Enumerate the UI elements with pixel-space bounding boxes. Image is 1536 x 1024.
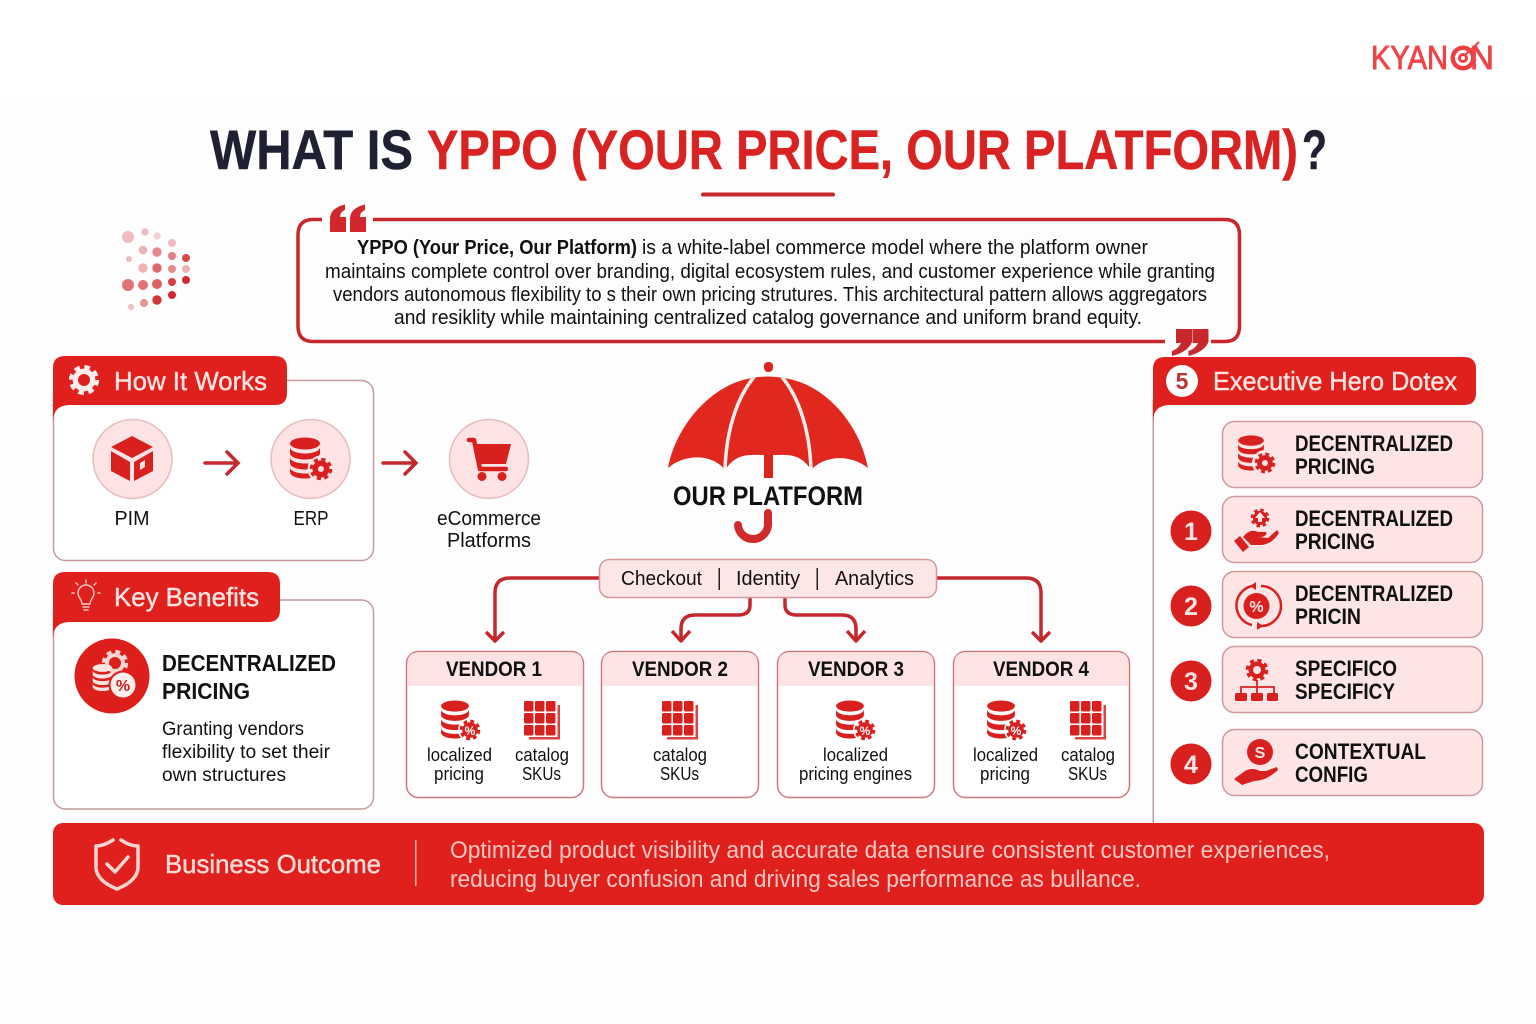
text: definition paragraph: maintains complete control over branding, digital ecosystem rules, and customer experience while granting: [325, 261, 1215, 283]
icon: catalog SKUs: [1070, 701, 1106, 740]
label: business outcome: Business Outcome: [165, 849, 381, 879]
shared services bar: Checkout: [621, 568, 702, 590]
text: benefit description: flexibility to set their: [162, 742, 331, 763]
card: decentralized pricing: [1222, 422, 1482, 488]
icon: shopping cart: [450, 420, 528, 498]
card 3: specifico specificy: SPECIFICY: [1295, 679, 1395, 704]
icon: localized pricing engines: %: [860, 724, 871, 738]
icon: catalog SKUs: [662, 701, 698, 740]
icon: opening quote mark: [330, 204, 366, 232]
labels: vendor 4: SKUs: [1068, 764, 1107, 784]
card 3: specifico specificy: [1170, 646, 1482, 712]
panel: vendor 1: [406, 652, 584, 798]
heading tab: how it works: How It Works: [114, 366, 267, 396]
decorative dot cluster: [122, 228, 190, 310]
logo: Kyanon: KYAN: [1371, 39, 1448, 76]
heading tab: how it works: [53, 356, 287, 422]
panel: vendor 3: [778, 652, 934, 798]
heading tab: key benefits: [53, 572, 280, 639]
label: eCommerce Platforms: eCommerce: [437, 508, 541, 530]
heading: our platform: OUR PLATFORM: [673, 481, 863, 511]
labels: vendor 2: [653, 745, 707, 784]
card 4: contextual config: CONTEXTUAL: [1295, 739, 1426, 764]
card 1: decentralized pricing: PRICING: [1295, 529, 1375, 554]
icon: localized pricing: %: [465, 724, 476, 738]
card 2: decentralized pricin: [1170, 572, 1482, 638]
panel: vendor 2: VENDOR 2: [632, 658, 728, 681]
icon: decentralized pricing badge: [74, 638, 150, 714]
panel: vendor 4: VENDOR 4: [993, 658, 1089, 681]
icon: localized pricing: [441, 700, 482, 742]
heading: decentralized pricing: DECENTRALIZED: [162, 650, 336, 676]
labels: vendor 3: localized: [823, 745, 888, 765]
card: decentralized pricing: DECENTRALIZED: [1295, 431, 1453, 456]
card 4: contextual config: [1170, 730, 1482, 796]
card 4: contextual config: CONFIG: [1295, 762, 1368, 787]
labels: vendor 3: pricing engines: [799, 764, 912, 784]
labels: vendor 4: localized: [973, 745, 1038, 765]
card 2: decentralized pricin: %: [1249, 599, 1264, 616]
panel: vendor 4: [954, 652, 1130, 798]
label: PIM: PIM: [114, 508, 150, 530]
labels: vendor 4: catalog: [1061, 745, 1115, 765]
panel: key benefits: [53, 572, 374, 809]
heading: decentralized pricing: [162, 650, 336, 704]
heading tab: key benefits: Key Benefits: [114, 582, 259, 612]
text: definition paragraph: [325, 237, 1215, 329]
icon: umbrella: [668, 362, 868, 539]
arrow: ERP to eCommerce: [383, 452, 416, 474]
text: definition paragraph: vendors autonomous flexibility to s their own pricing strutures. This architectural pattern allows aggregators: [333, 284, 1207, 306]
title: WHAT IS: [210, 118, 413, 181]
labels: vendor 3: [799, 745, 912, 784]
card 2: decentralized pricin: DECENTRALIZED: [1295, 581, 1453, 606]
card 2: decentralized pricin: PRICIN: [1295, 604, 1361, 629]
title: YPPO (YOUR PRICE, OUR PLATFORM): [427, 118, 1298, 181]
text: outcome description: reducing buyer confusion and driving sales performance as bullance.: [450, 866, 1141, 893]
card 1: decentralized pricing: DECENTRALIZED: [1295, 506, 1453, 531]
labels: vendor 1: pricing: [434, 764, 484, 784]
logo: Kyanon: N: [1470, 39, 1494, 76]
card 3: specifico specificy: SPECIFICO: [1295, 656, 1397, 681]
title: ?: [1302, 118, 1327, 181]
labels: vendor 2: SKUs: [660, 764, 699, 784]
icon: light bulb: [72, 580, 100, 610]
icon: PIM box: [93, 420, 172, 498]
labels: vendor 2: catalog: [653, 745, 707, 765]
shared services bar: Identity: [736, 568, 800, 590]
panel: how it works: [53, 356, 374, 560]
icon: localized pricing: %: [1011, 724, 1022, 738]
heading tab: executive hero dotex: Executive Hero Dotex: [1213, 366, 1457, 396]
shared services bar: Analytics: [835, 568, 914, 590]
labels: vendor 4: pricing: [980, 764, 1030, 784]
heading tab: executive hero dotex: [1153, 357, 1476, 422]
quote panel: definition: [298, 204, 1240, 356]
connector arrows: platform to vendors: [486, 578, 1050, 641]
icon: gear: [71, 367, 97, 393]
heading tab: executive hero dotex: 5: [1176, 368, 1189, 394]
label: ERP: ERP: [294, 508, 328, 530]
labels: vendor 1: catalog: [515, 745, 569, 765]
text: outcome description: [450, 837, 1330, 893]
panel: business outcome: [53, 823, 1484, 905]
icon: decentralized pricing badge: %: [116, 678, 130, 695]
text: benefit description: [162, 719, 331, 786]
card: decentralized pricing: PRICING: [1295, 454, 1375, 479]
card 2: decentralized pricin: 2: [1184, 593, 1198, 621]
card 1: decentralized pricing: [1170, 496, 1482, 562]
card 4: contextual config: 4: [1184, 751, 1198, 779]
heading: decentralized pricing: PRICING: [162, 678, 250, 704]
text: definition paragraph: is a white-label commerce model where the platform owner: [642, 237, 1148, 259]
panel: vendor 1: VENDOR 1: [446, 658, 542, 681]
icon: ERP database: [271, 420, 350, 498]
icon: closing quote mark: [1172, 329, 1208, 356]
text: benefit description: Granting vendors: [162, 719, 304, 740]
icon: shield with check: [96, 840, 138, 889]
icon: catalog SKUs: [524, 701, 560, 740]
icon: localized pricing engines: [836, 700, 877, 742]
arrow: PIM to ERP: [205, 452, 238, 474]
text: definition paragraph: YPPO (Your Price, Our Platform): [357, 237, 637, 259]
card 1: decentralized pricing: 1: [1184, 518, 1198, 546]
text: outcome description: Optimized product visibility and accurate data ensure consistent customer experiences,: [450, 837, 1330, 864]
text: definition paragraph: and resiklity while maintaining centralized catalog governance and uniform brand equity.: [394, 307, 1142, 329]
label: eCommerce Platforms: Platforms: [447, 530, 531, 552]
shared services bar: [600, 560, 936, 598]
icon: localized pricing: [987, 700, 1028, 742]
panel: vendor 3: VENDOR 3: [808, 658, 904, 681]
card 4: contextual config: S: [1255, 745, 1266, 762]
labels: vendor 1: SKUs: [522, 764, 561, 784]
labels: vendor 4: [973, 745, 1115, 784]
labels: vendor 1: [427, 745, 569, 784]
panel: vendor 2: [602, 652, 758, 798]
card 3: specifico specificy: 3: [1184, 668, 1198, 696]
label: eCommerce Platforms: [437, 508, 541, 552]
labels: vendor 1: localized: [427, 745, 492, 765]
text: benefit description: own structures: [162, 765, 286, 786]
panel: executive hero dotex: [1152, 357, 1482, 823]
